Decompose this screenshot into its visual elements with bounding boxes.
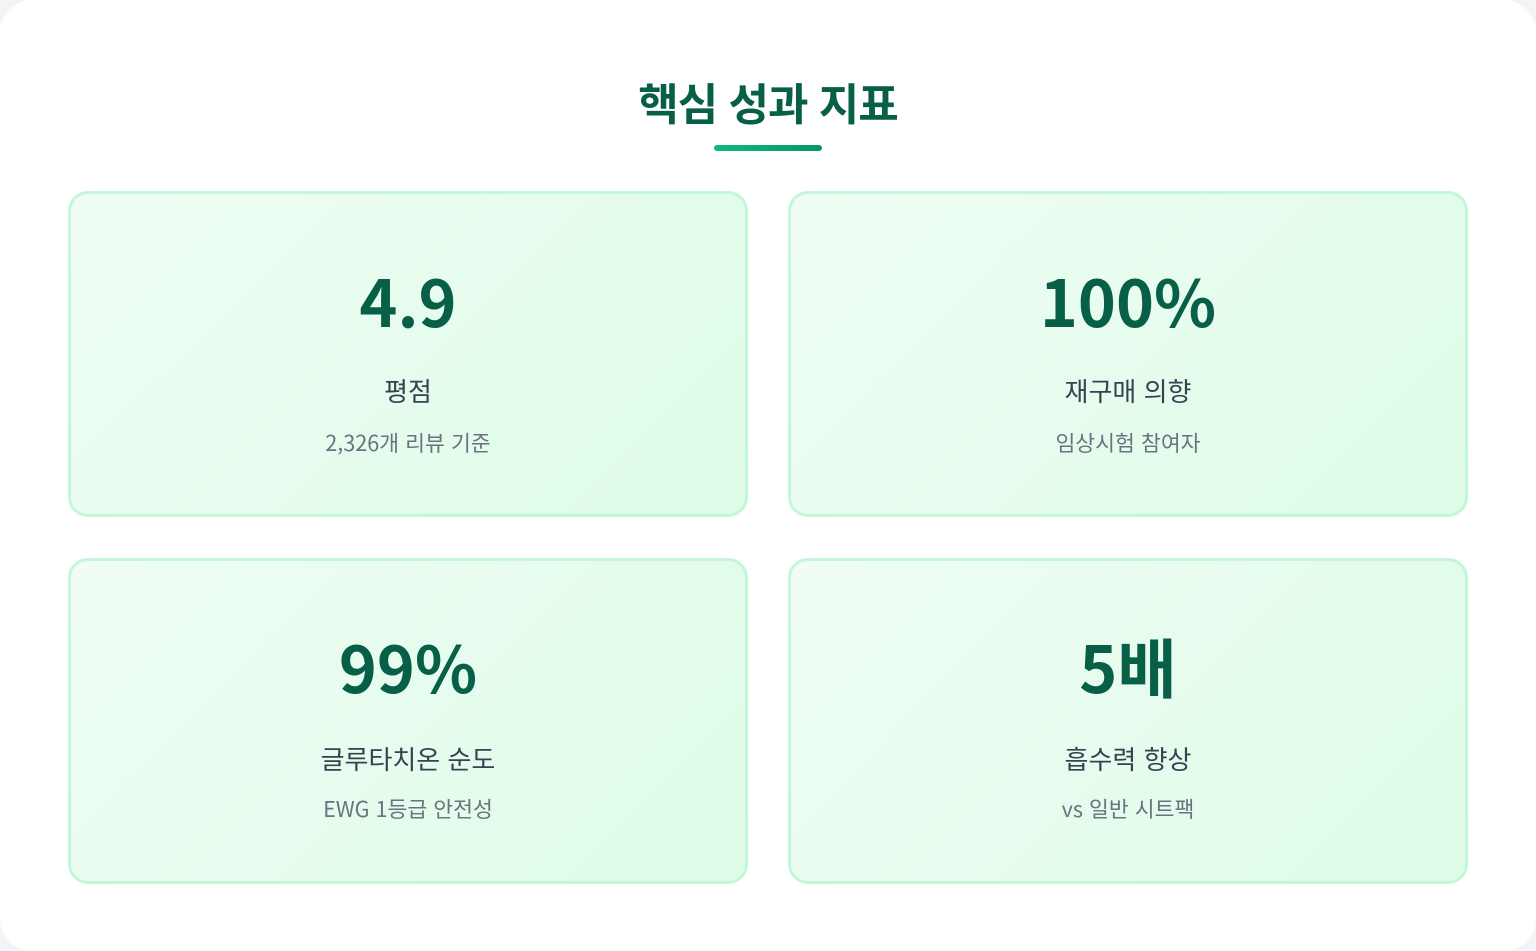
panel: repurchase intent	[788, 191, 1468, 517]
panel: rating	[68, 191, 748, 517]
metric note: absorption: vs 일반 시트팩	[1062, 793, 1194, 824]
metric note: rating: 2,326개 리뷰 기준	[325, 427, 491, 458]
metric value: rating: 4.9	[359, 252, 457, 346]
metric value: purity: 99%	[339, 618, 477, 712]
title: 핵심 성과 지표	[638, 69, 898, 133]
metric note: purity: EWG 1등급 안전성	[323, 793, 493, 824]
metric note: repurchase: 임상시험 참여자	[1055, 427, 1201, 458]
metric value: repurchase: 100%	[1040, 252, 1216, 346]
metric label: rating: 평점	[384, 372, 432, 409]
metric label: absorption: 흡수력 향상	[1065, 740, 1191, 777]
panel: absorption	[788, 558, 1468, 884]
title underline	[714, 145, 822, 151]
metric value: absorption: 5배	[1079, 618, 1177, 712]
metric label: repurchase: 재구매 의향	[1065, 372, 1191, 409]
metric label: purity: 글루타치온 순도	[321, 740, 495, 777]
panel: glutathione purity	[68, 558, 748, 884]
